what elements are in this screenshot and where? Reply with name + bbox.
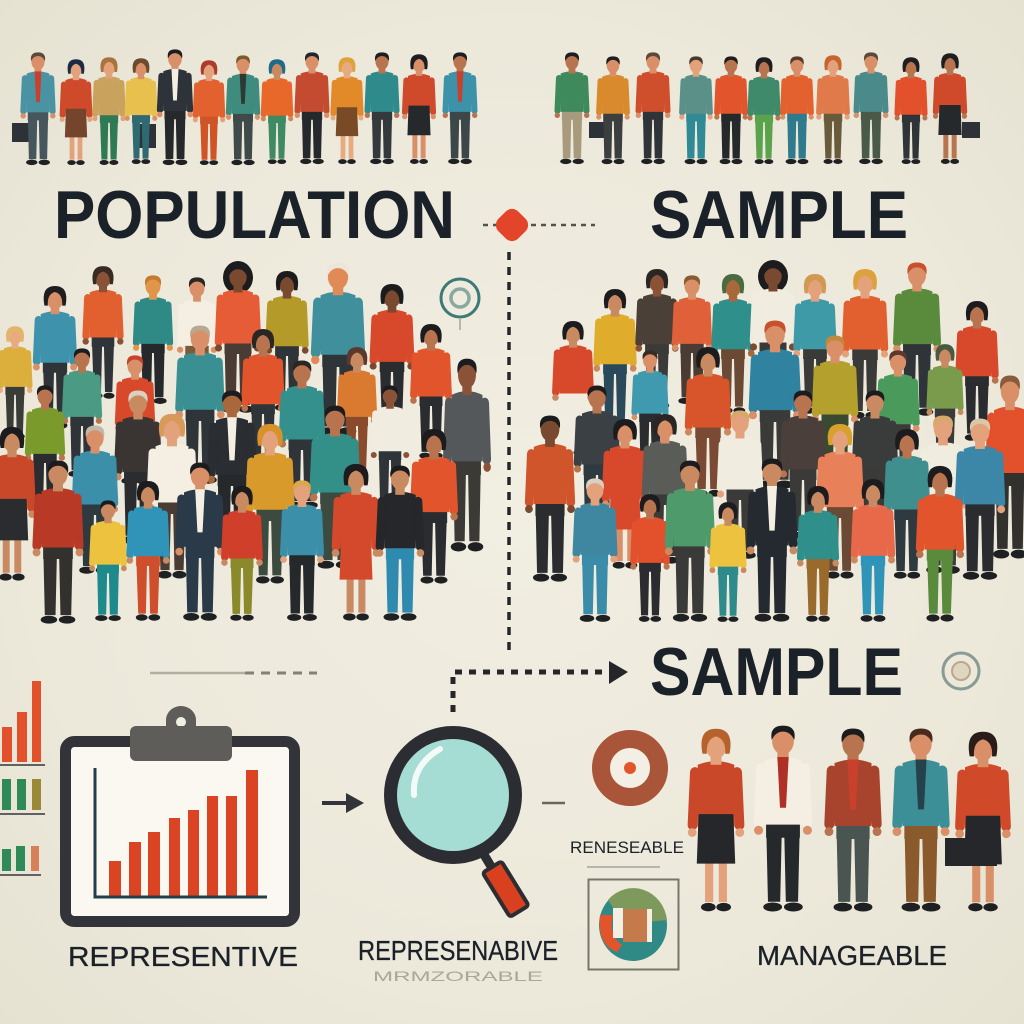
bar chart	[95, 768, 267, 897]
label: reneseable: RENESEABLE	[570, 838, 684, 857]
crowd: population group	[0, 258, 491, 624]
crowd: sample group	[525, 259, 1024, 622]
faded dash above the chart	[150, 672, 317, 674]
arrow: clipboard to magnifier	[322, 793, 364, 813]
people: sample of five	[688, 721, 1011, 912]
mini bar charts at left edge	[0, 681, 45, 875]
heading: sample: SAMPLE	[650, 177, 908, 253]
icon: small ring	[943, 653, 979, 689]
heading: population: POPULATION	[54, 177, 455, 253]
person: man in brown-red	[825, 724, 881, 912]
label: represenabive: REPRESENABIVE	[358, 935, 558, 966]
heading: second sample: SAMPLE	[650, 634, 903, 710]
icon: magnifying glass	[390, 732, 529, 917]
icon: target ring	[441, 279, 479, 330]
top row: population people	[12, 47, 477, 165]
arrow: dotted path to sample	[453, 661, 628, 712]
person: woman in orange	[688, 726, 744, 911]
person: man in teal	[893, 724, 949, 912]
top row: sample people	[555, 50, 980, 164]
person: woman with briefcase	[945, 729, 1011, 911]
icon: framed pie	[588, 880, 678, 970]
clipboard clip	[130, 706, 232, 761]
label: representive: REPRESENTIVE	[68, 941, 298, 972]
connector: dotted line with red node	[483, 205, 595, 650]
label: manageable: MANAGEABLE	[757, 940, 947, 971]
icon: brown donut	[601, 739, 659, 797]
short dash	[542, 802, 565, 804]
panel: clipboard with rising bar chart	[66, 706, 294, 922]
person: man in white shirt	[754, 721, 812, 911]
faded label: MRMZORABLE	[373, 968, 543, 984]
